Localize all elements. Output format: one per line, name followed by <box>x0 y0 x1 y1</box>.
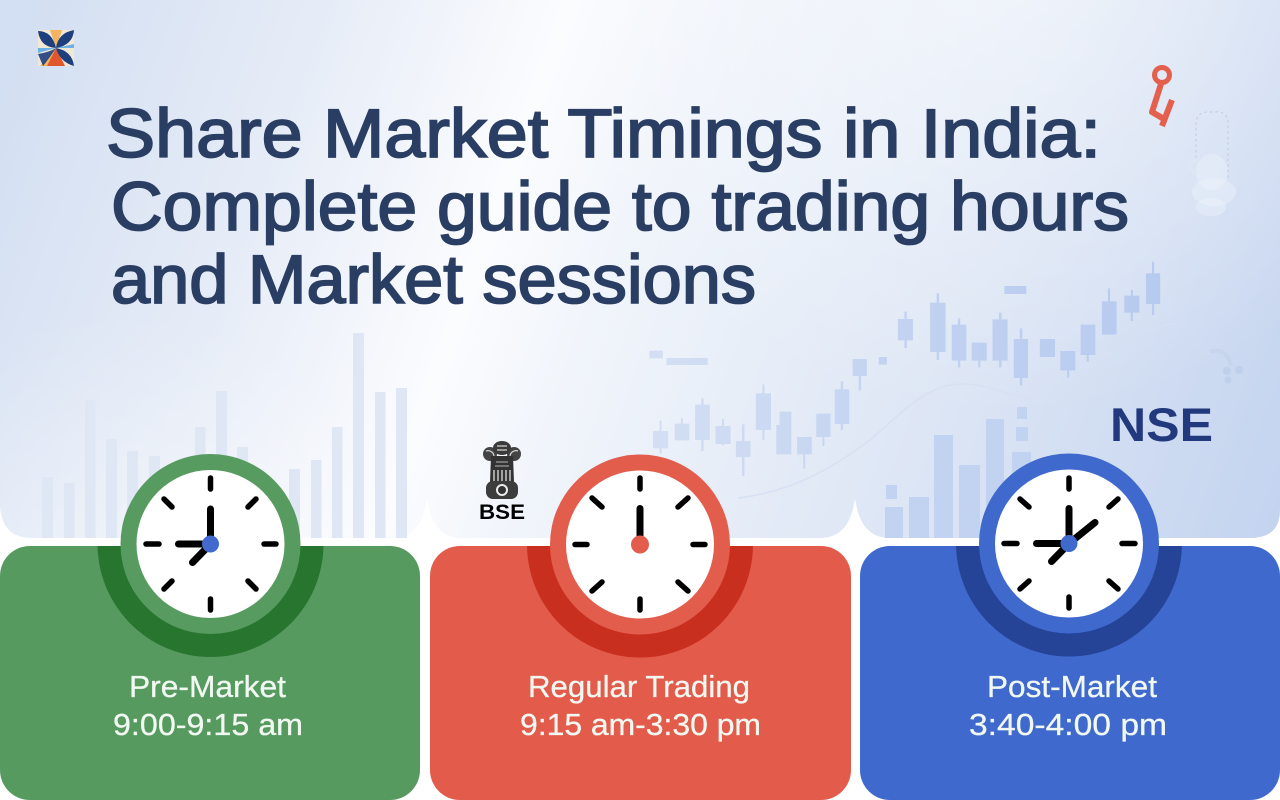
clock: regular trading <box>550 454 730 634</box>
NSE label: NSE <box>1110 398 1213 451</box>
background candlestick chart <box>649 262 1160 476</box>
icon: national emblem <box>483 441 521 499</box>
card: post-market <box>860 430 1280 800</box>
time: post-market: 3:40-4:00 pm <box>969 707 1167 742</box>
clock: pre-market <box>120 454 300 634</box>
background trend line <box>738 323 1178 498</box>
BSE emblem with label <box>479 441 525 524</box>
title: and Market sessions <box>111 241 756 318</box>
clock: post-market <box>979 454 1159 634</box>
card: regular trading <box>430 432 851 800</box>
title: Complete guide to trading hours <box>111 168 1129 245</box>
title: Share Market Timings in India: <box>106 95 1101 172</box>
background bar chart: right <box>885 407 1031 538</box>
title <box>106 95 1129 318</box>
label: regular trading: Regular Trading <box>528 669 750 704</box>
background bar chart: left <box>42 333 407 538</box>
icon: faint network glyph <box>1210 351 1243 384</box>
icon: red key <box>1152 68 1172 126</box>
time: pre-market: 9:00-9:15 am <box>113 707 303 742</box>
label: post-market: Post-Market <box>987 669 1157 704</box>
card: pre-market <box>0 431 420 800</box>
logo <box>38 30 74 66</box>
background panel <box>0 0 1280 538</box>
time: regular trading: 9:15 am-3:30 pm <box>520 707 761 742</box>
icon: faint dashed outline figure <box>1189 112 1236 216</box>
label: pre-market: Pre-Market <box>129 669 286 704</box>
BSE label: BSE <box>479 501 525 524</box>
